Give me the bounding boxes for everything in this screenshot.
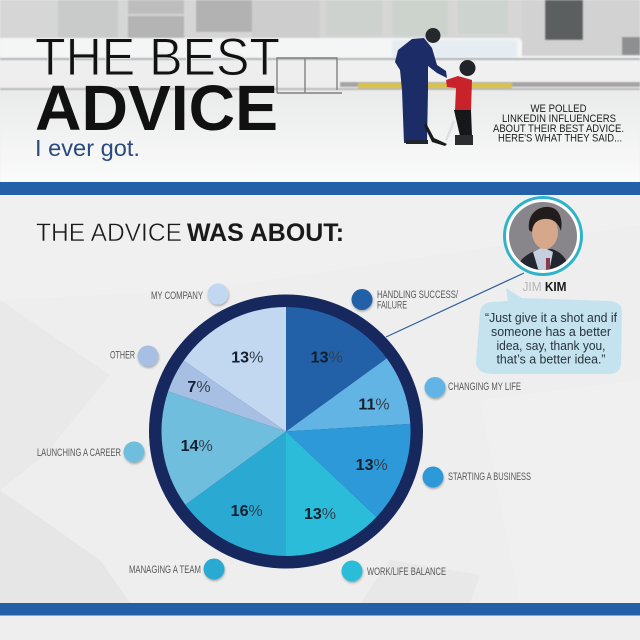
slice: managing a team 16%	[185, 432, 286, 556]
legend: managing a team	[129, 558, 224, 580]
percentage values: 16%	[231, 503, 263, 520]
slice: work/life balance 13%	[286, 432, 376, 556]
name: Jim Kim: JIM KIM	[522, 280, 566, 294]
quote text: that’s a better idea.”	[496, 352, 606, 366]
quote text: idea, say, thank you,	[496, 339, 606, 353]
legend: starting a business: STARTING A BUSINESS	[448, 471, 531, 483]
title	[35, 28, 280, 161]
slice: my company 13%	[184, 307, 286, 432]
bubble shape	[476, 288, 622, 374]
title line: ADVICE: ADVICE	[35, 72, 278, 144]
connector line from pie to portrait	[386, 273, 524, 337]
intro text: LINKEDIN INFLUENCERS	[502, 113, 616, 125]
slice: handling success/failure 13%	[286, 307, 387, 432]
legend: launching a career	[37, 442, 144, 462]
legend: my company	[151, 284, 228, 304]
percentage values: 13%	[304, 506, 336, 523]
legend: other	[110, 346, 158, 366]
slice: starting a business 13%	[286, 424, 411, 517]
percentage values	[181, 350, 390, 523]
top blue band	[0, 182, 640, 195]
intro text: HERE'S WHAT THEY SAID...	[498, 132, 622, 144]
icon: coach	[395, 28, 447, 146]
legend: other: OTHER	[110, 350, 135, 362]
legend: handling success/failure: HANDLING SUCCESS/	[377, 289, 459, 301]
legend: handling success/failure	[352, 289, 459, 312]
icon: child player	[445, 60, 476, 145]
legend: launching a career: LAUNCHING A CAREER	[37, 447, 121, 459]
percentage values: 13%	[311, 350, 343, 366]
title line: I ever got: I ever got.	[35, 135, 140, 161]
percentage values: 13%	[356, 457, 388, 474]
legend: starting a business	[422, 466, 531, 488]
legend: changing my life: CHANGING MY LIFE	[448, 381, 521, 393]
percentage values: 7%	[187, 379, 211, 396]
heading: the advice was about: THE ADVICE	[36, 219, 182, 247]
heading: the advice was about	[36, 219, 344, 247]
legend: managing a team: MANAGING A TEAM	[129, 564, 201, 576]
heading: the advice was about: WAS ABOUT:	[187, 219, 344, 247]
bottom blue band	[0, 603, 640, 616]
quote text: someone has a better	[491, 325, 611, 339]
speech bubble quote	[476, 288, 622, 374]
title line: THE BEST: THE BEST	[35, 28, 280, 87]
portrait: Jim Kim	[504, 198, 582, 274]
legend: changing my life	[424, 377, 521, 398]
slice: launching a career 14%	[161, 391, 286, 505]
legend: work/life balance	[342, 560, 446, 582]
slice: changing my life 11%	[286, 358, 410, 432]
intro text	[493, 103, 624, 144]
legend: handling success/failure: FAILURE	[377, 300, 407, 312]
legend: work/life balance: WORK/LIFE BALANCE	[367, 566, 446, 578]
pie chart	[149, 294, 423, 568]
legend: my company: MY COMPANY	[151, 290, 203, 302]
header photo: ice rink with coach and child	[0, 0, 640, 182]
pie outer ring	[149, 294, 423, 568]
percentage values: 13%	[231, 350, 263, 366]
percentage values: 14%	[181, 438, 213, 455]
slice: other 7%	[168, 361, 286, 432]
intro text: WE POLLED	[530, 103, 587, 115]
quote text	[485, 311, 618, 366]
icon: hockey goal	[277, 58, 342, 93]
quote text: “Just give it a shot and if	[485, 311, 618, 325]
percentage values: 11%	[358, 396, 390, 414]
